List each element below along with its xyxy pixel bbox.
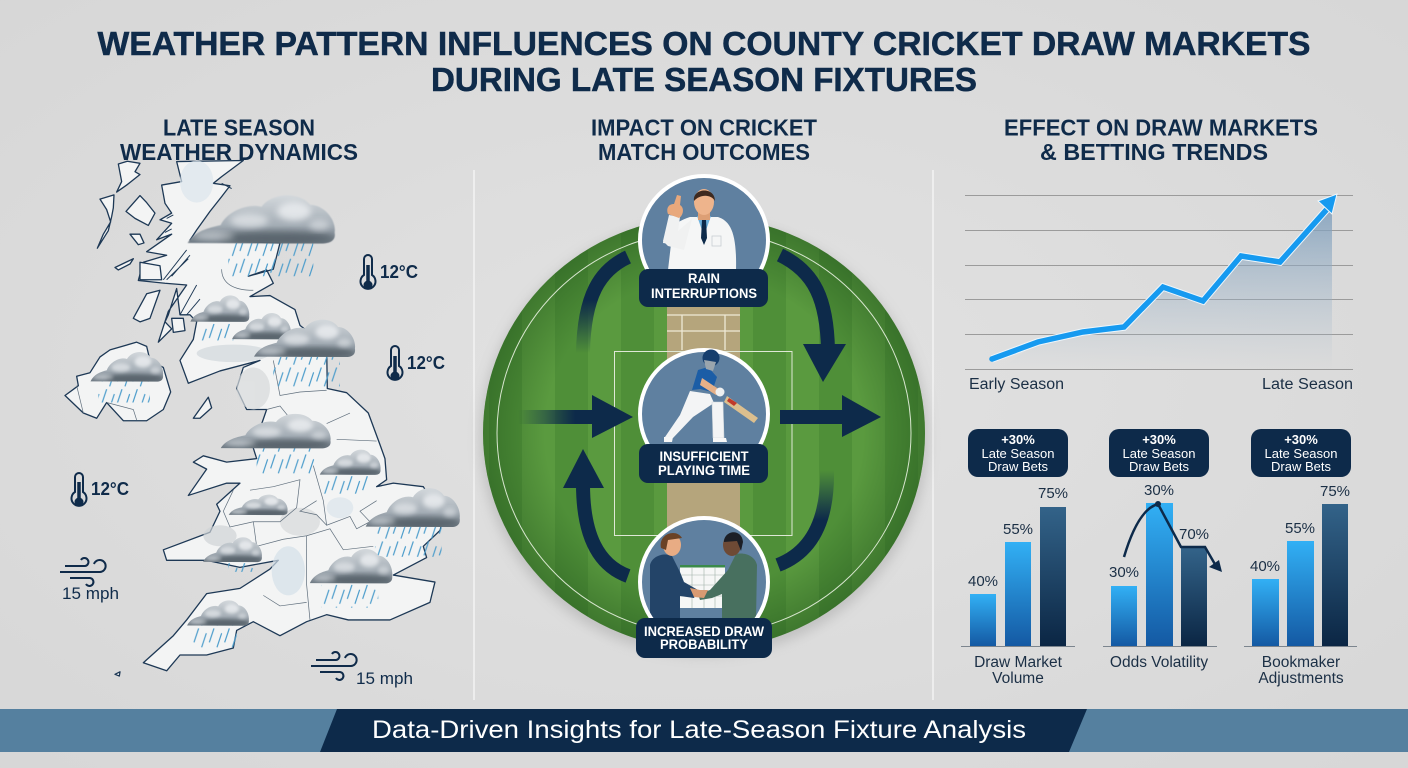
rain: [98, 243, 442, 648]
map: Northern Ireland: [65, 342, 171, 421]
bar chart: odds volatility: 30%: [1109, 564, 1139, 581]
map: weather wash: [180, 161, 353, 595]
label: early season: Early Season: [969, 376, 1064, 393]
heading: weather: LATE SEASON: [163, 114, 315, 140]
icon: wind 2: [311, 652, 357, 680]
pitch: [667, 305, 740, 545]
bar chart: bookmaker adjustments: 55%: [1285, 520, 1315, 537]
bar chart: draw market volume: [961, 429, 1075, 687]
bar chart: odds volatility: Draw Bets: [1129, 459, 1189, 474]
arrow: left horizontal: [518, 395, 633, 438]
bar chart: draw market volume: 40%: [968, 573, 998, 590]
title: [98, 25, 1310, 98]
label: 12C 3: 12°C: [91, 479, 129, 499]
bar chart: bookmaker adjustments: 75%: [1320, 483, 1350, 500]
heading: weather: WEATHER DYNAMICS: [120, 139, 358, 165]
arrow: top right curved: [780, 255, 846, 382]
bar chart: odds volatility: [1103, 429, 1222, 671]
heading: effect: EFFECT ON DRAW MARKETS: [1004, 114, 1318, 140]
heading: effect: & BETTING TRENDS: [1040, 139, 1268, 165]
heading: weather: [120, 114, 358, 165]
map: sea lochs: [163, 183, 232, 315]
clouds: [90, 195, 460, 626]
bar chart: odds volatility: Odds Volatility: [1110, 654, 1208, 671]
bar chart: draw market volume: Draw Market: [974, 654, 1063, 671]
node: increased draw probability: [636, 518, 772, 658]
label: late season: Late Season: [1262, 376, 1353, 393]
map: Great Britain: [138, 161, 443, 671]
arrow: right horizontal: [780, 395, 881, 437]
bar chart: bookmaker adjustments: Late Season: [1264, 446, 1338, 461]
cricket field: [483, 217, 925, 649]
bar chart: bookmaker adjustments: Adjustments: [1258, 670, 1344, 687]
icon: thermometer 1: [360, 255, 376, 290]
UK weather map: [65, 161, 460, 676]
label: insufficient playing time: INSUFFICIENT: [660, 449, 749, 464]
panel: impact on cricket match outcomes: [480, 114, 928, 658]
inner rectangle: [614, 352, 792, 536]
arrow: bottom right curved: [778, 470, 827, 565]
icon: umpire: [663, 189, 736, 270]
footer banner: Data-Driven Insights for Late-Season Fixture Analysis: [372, 716, 1026, 744]
label: increased draw probability: INCREASED DRAW: [644, 624, 764, 639]
panel: late season weather dynamics: [60, 114, 460, 688]
node: rain interruptions: [639, 176, 768, 307]
panel: effect on draw markets: [961, 114, 1357, 687]
bar chart: odds volatility: 30%: [1144, 482, 1174, 499]
bar chart: draw market volume: 55%: [1003, 521, 1033, 538]
label: rain interruptions: RAIN: [688, 271, 720, 286]
label: increased draw probability: [636, 618, 772, 658]
label: wind 2: 15 mph: [356, 669, 413, 688]
line chart: [965, 194, 1353, 393]
bar chart: draw market volume: Late Season: [981, 446, 1055, 461]
bar chart: bookmaker adjustments: Bookmaker: [1262, 654, 1340, 671]
icon: handshake with fixture chart: [650, 532, 757, 620]
icon: wind 1: [60, 558, 106, 586]
bar chart: draw market volume: +30%: [1001, 432, 1035, 447]
heading: impact: IMPACT ON CRICKET: [591, 114, 817, 140]
heading: impact: MATCH OUTCOMES: [598, 139, 810, 165]
footer banner: [0, 709, 1408, 752]
arrow: bottom left curved: [563, 449, 628, 576]
bar chart: odds volatility: Late Season: [1122, 446, 1196, 461]
map: county boundaries: [222, 269, 377, 620]
arrow: top left curved: [583, 257, 628, 353]
node: insufficient playing time: [639, 350, 768, 483]
heading: impact: [591, 114, 817, 165]
icon: batsman: [664, 350, 758, 442]
label: 12C 2: 12°C: [407, 353, 445, 373]
icon: thermometer 3: [72, 473, 86, 506]
label: increased draw probability: PROBABILITY: [660, 637, 748, 652]
bar chart: draw market volume: Draw Bets: [988, 459, 1048, 474]
bar chart: bookmaker adjustments: 40%: [1250, 558, 1280, 575]
bar chart: bookmaker adjustments: +30%: [1284, 432, 1318, 447]
label: rain interruptions: [639, 269, 768, 307]
bar chart: draw market volume: 75%: [1038, 485, 1068, 502]
label: 12C 1: 12°C: [380, 262, 418, 282]
bar chart: odds volatility: +30%: [1142, 432, 1176, 447]
title: DURING LATE SEASON FIXTURES: [431, 61, 977, 98]
label: rain interruptions: INTERRUPTIONS: [651, 286, 757, 301]
bar chart: odds volatility: 70%: [1179, 526, 1209, 543]
bar chart: bookmaker adjustments: Draw Bets: [1271, 459, 1331, 474]
label: wind 1: 15 mph: [62, 584, 119, 603]
label: insufficient playing time: [639, 444, 768, 483]
map: Scottish islands: [97, 161, 212, 676]
bar chart: draw market volume: Volume: [992, 670, 1044, 687]
bar chart: bookmaker adjustments: [1244, 429, 1357, 687]
heading: effect: [1004, 114, 1318, 165]
trend arrow: [1124, 501, 1222, 572]
title: WEATHER PATTERN INFLUENCES ON COUNTY CRICKET DRAW MARKETS: [98, 25, 1310, 62]
label: insufficient playing time: PLAYING TIME: [658, 463, 750, 478]
icon: thermometer 2: [388, 346, 403, 380]
